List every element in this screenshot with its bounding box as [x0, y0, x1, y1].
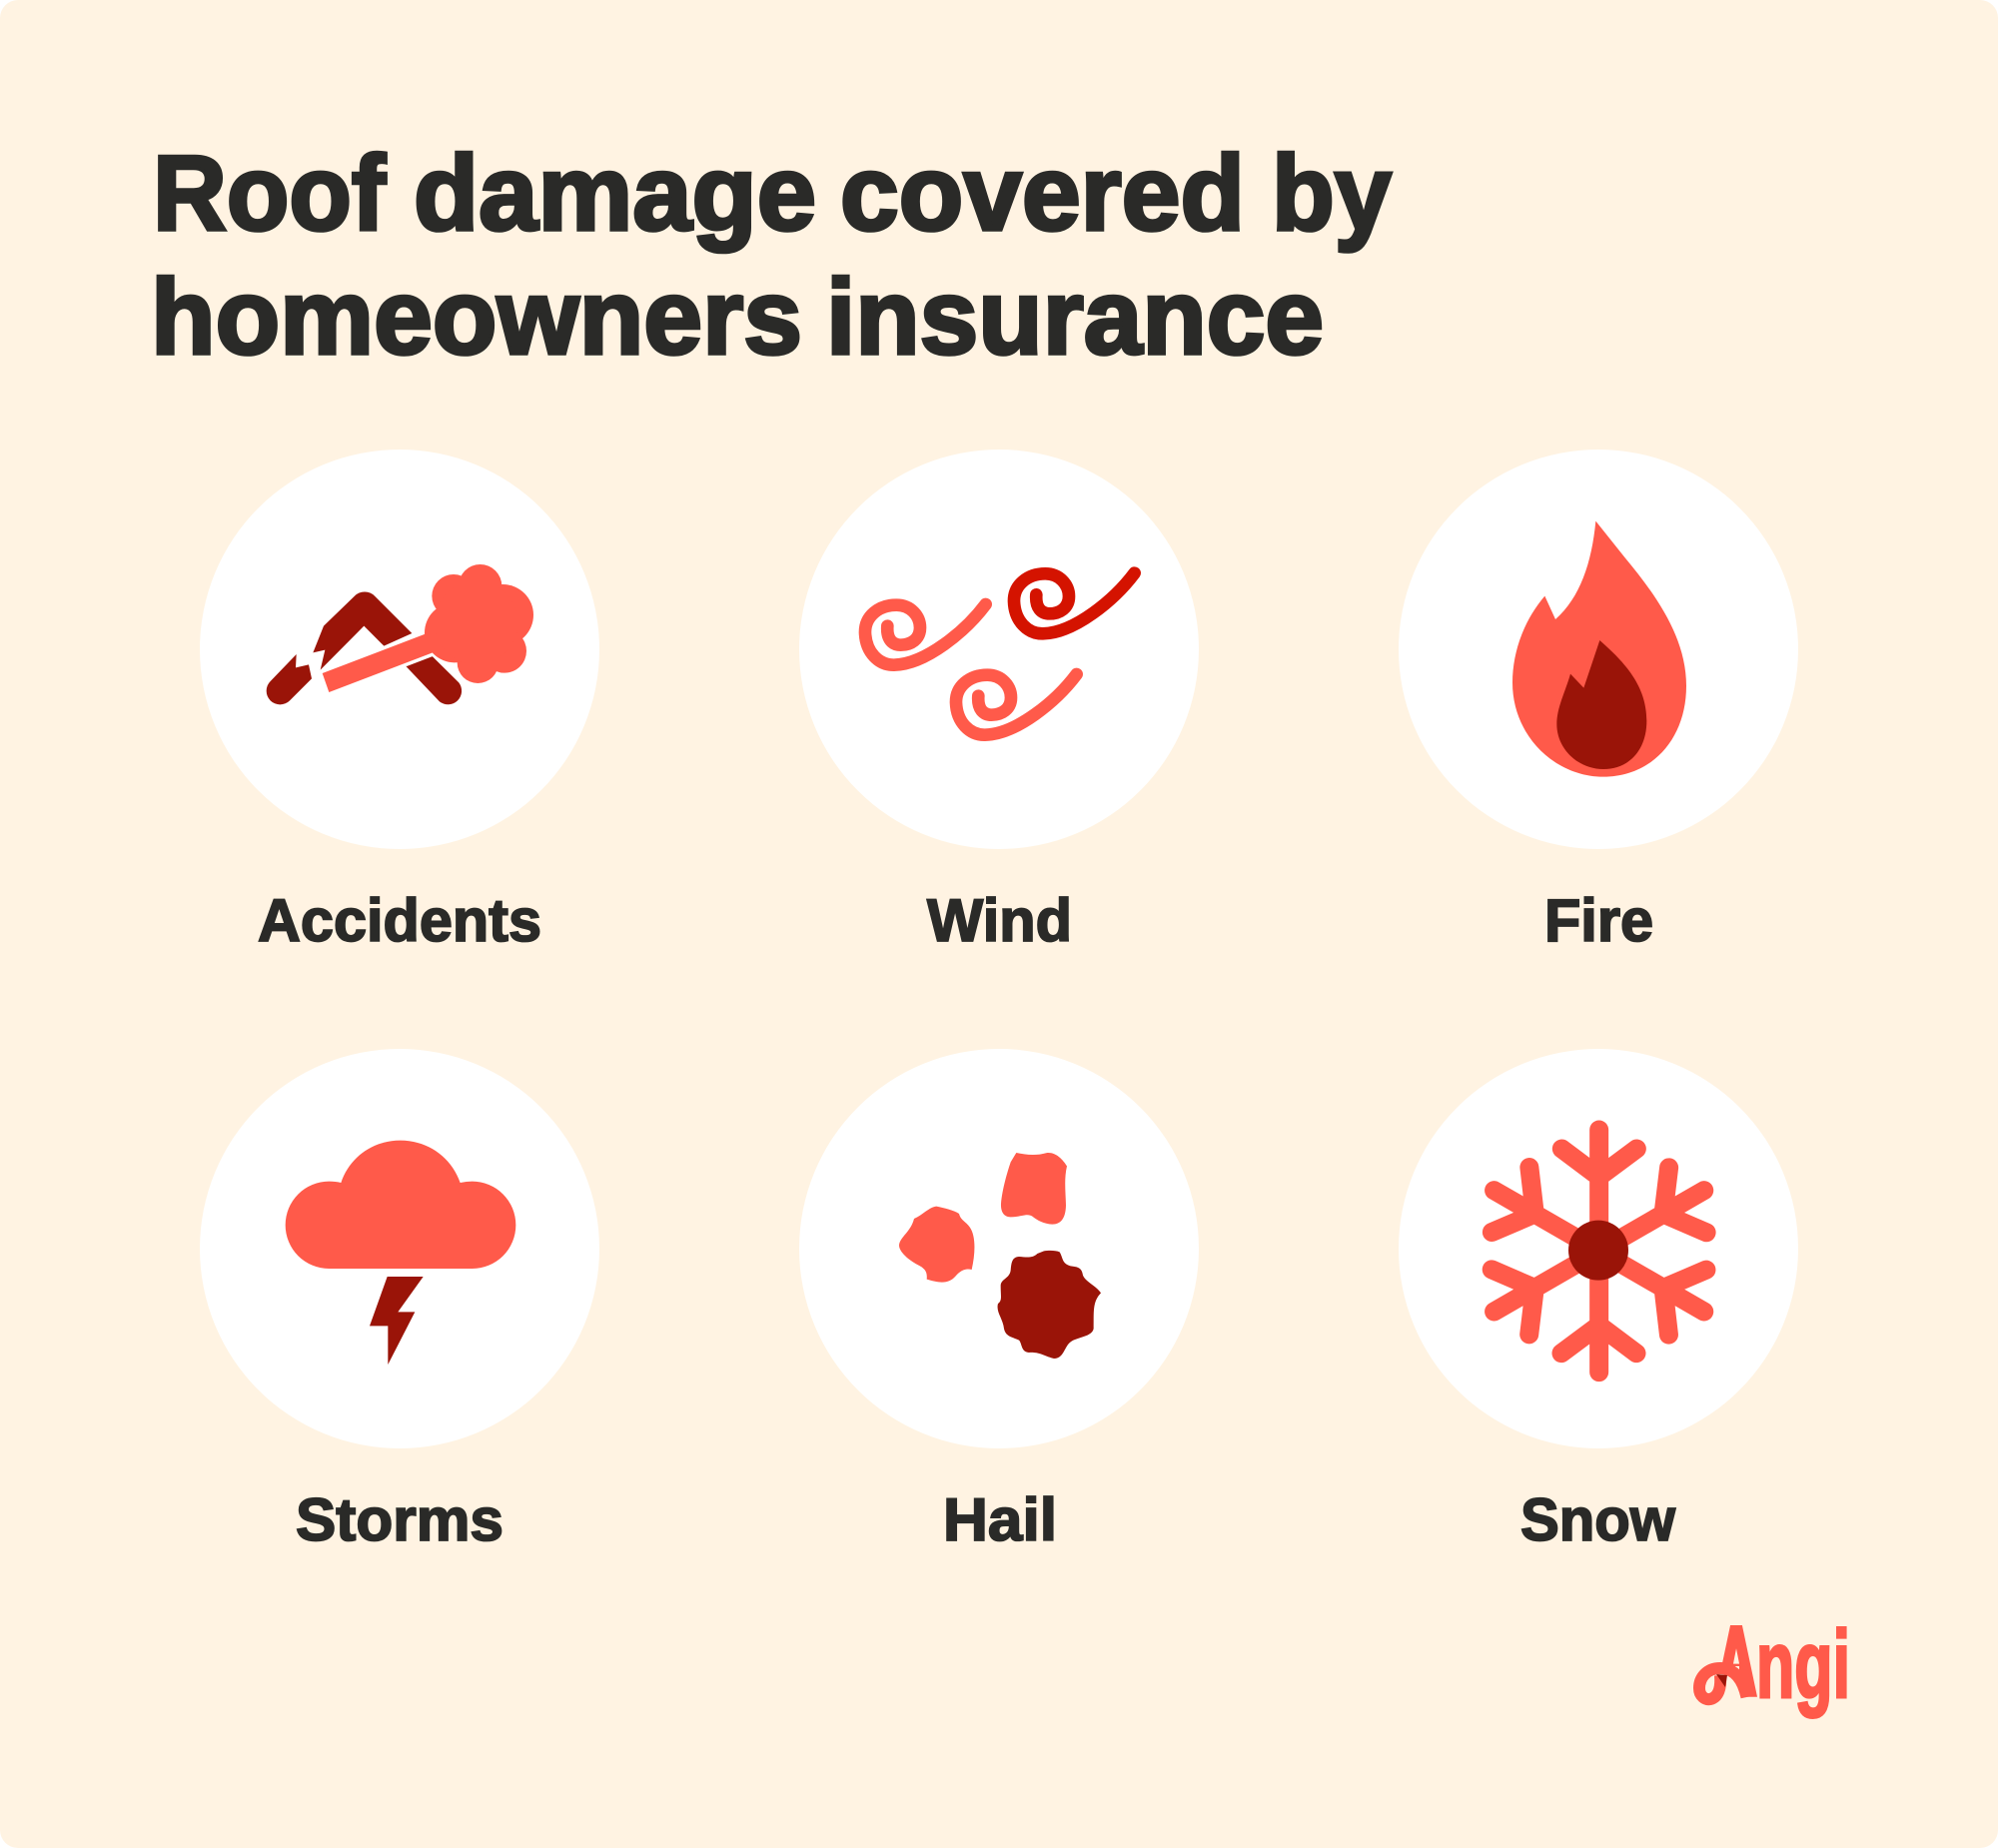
icon: snowflake	[1476, 1130, 1723, 1373]
icon: storm cloud with lightning	[286, 1141, 515, 1365]
label: hail: Hail	[943, 1486, 1057, 1553]
title: homeowners	[151, 257, 802, 377]
label: storms: Storms	[296, 1486, 503, 1553]
logo: Angi: A	[1716, 1608, 1756, 1715]
panel: storms	[200, 1049, 599, 1553]
title: damage	[414, 133, 816, 253]
title: insurance	[826, 257, 1324, 377]
title	[151, 133, 1392, 377]
icon: hailstones	[899, 1153, 1101, 1359]
panel: accidents	[200, 450, 599, 954]
logo: Angi: ngi	[1756, 1611, 1850, 1718]
panel: wind	[799, 450, 1199, 954]
title: covered	[840, 133, 1245, 253]
panel: snow	[1399, 1049, 1798, 1553]
icon: flame	[1512, 521, 1686, 777]
panel: fire	[1399, 450, 1798, 954]
icon: accident, tree branch on broken roof	[267, 564, 533, 704]
icon: wind swirls	[865, 573, 1135, 735]
label: snow: Snow	[1520, 1486, 1675, 1553]
title: Roof	[153, 133, 386, 253]
title: by	[1272, 133, 1392, 253]
label: wind: Wind	[927, 887, 1072, 954]
logo: Angi	[1693, 1625, 1847, 1719]
label: fire: Fire	[1544, 887, 1653, 954]
label: accidents: Accidents	[258, 887, 541, 954]
panel: hail	[799, 1049, 1199, 1553]
